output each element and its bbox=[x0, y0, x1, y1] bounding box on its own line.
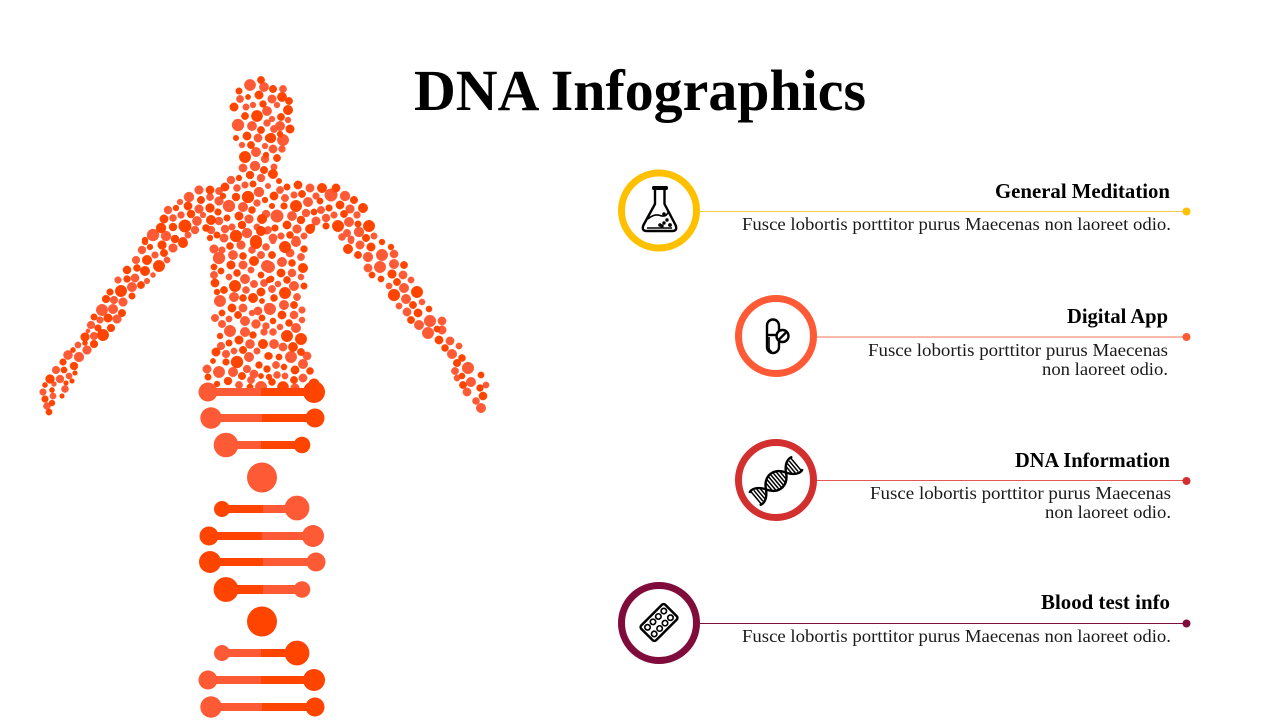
icon: DNA helix bbox=[749, 456, 803, 506]
connector line bbox=[817, 336, 1186, 338]
item: Blood test info bbox=[622, 586, 1190, 660]
rung 9 bbox=[198, 669, 325, 691]
end dot bbox=[1182, 477, 1190, 485]
connector line bbox=[700, 622, 1186, 624]
rung 8 bbox=[214, 641, 309, 665]
icon: capsule and tablet bbox=[767, 320, 788, 353]
end dot bbox=[1182, 333, 1190, 341]
heading: Blood test info bbox=[1041, 590, 1170, 614]
rung 7 bbox=[214, 577, 310, 602]
human figure made of dots bbox=[40, 76, 489, 415]
icon ring bbox=[738, 298, 814, 374]
centre node dark bbox=[247, 606, 277, 636]
rung 3 bbox=[214, 433, 310, 457]
connector line bbox=[817, 480, 1186, 482]
body text: non laoreet odio. bbox=[1042, 359, 1168, 379]
centre node light bbox=[247, 462, 277, 492]
rung 10 bbox=[200, 696, 324, 718]
icon ring bbox=[738, 442, 814, 518]
icon ring bbox=[622, 586, 696, 660]
body text: Fusce lobortis porttitor purus Maecenas bbox=[868, 340, 1168, 360]
heading: DNA Information bbox=[1015, 448, 1170, 472]
rung 1 bbox=[198, 378, 325, 403]
body text: Fusce lobortis porttitor purus Maecenas non laoreet odio. bbox=[742, 626, 1171, 646]
rung 5 bbox=[200, 525, 324, 547]
end dot bbox=[1182, 620, 1190, 628]
heading: Digital App bbox=[1067, 304, 1168, 328]
body text: Fusce lobortis porttitor purus Maecenas bbox=[870, 483, 1171, 503]
icon: flask bbox=[643, 186, 676, 231]
DNA ladder bbox=[198, 378, 326, 718]
rung 4 bbox=[214, 496, 309, 520]
body text: Fusce lobortis porttitor purus Maecenas non laoreet odio. bbox=[742, 214, 1171, 234]
item: DNA Information bbox=[738, 442, 1190, 522]
heading: General Meditation bbox=[995, 179, 1170, 203]
rung 2 bbox=[200, 407, 324, 429]
item: General Meditation bbox=[622, 173, 1190, 248]
item: Digital App bbox=[738, 298, 1190, 379]
end dot bbox=[1182, 208, 1190, 216]
body text: non laoreet odio. bbox=[1045, 502, 1171, 522]
icon: blister pack bbox=[640, 603, 678, 642]
body text bbox=[870, 483, 1171, 522]
connector line bbox=[700, 210, 1186, 212]
title: DNA Infographics bbox=[414, 58, 866, 123]
body text bbox=[868, 340, 1168, 379]
rung 6 bbox=[199, 551, 326, 573]
icon ring bbox=[622, 173, 696, 248]
